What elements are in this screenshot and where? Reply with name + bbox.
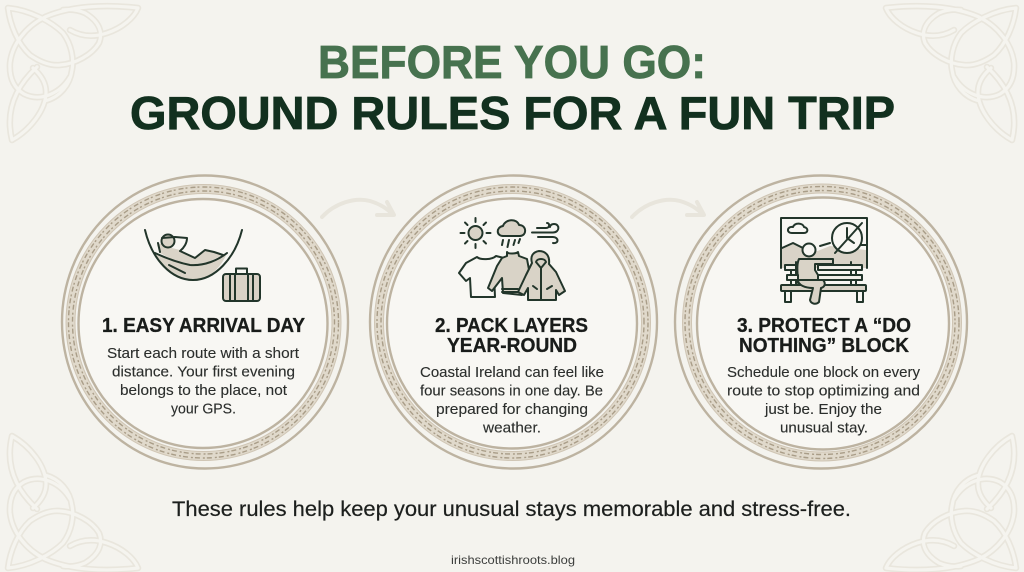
body text: Start each route with a short	[107, 346, 299, 362]
arrow: step 1 to step 2	[322, 200, 394, 217]
body text	[107, 346, 299, 418]
body text: belongs to the place, not	[120, 383, 287, 399]
heading: 1. EASY ARRIVAL DAY	[102, 315, 306, 337]
panel: step 2 pack layers year-round	[370, 176, 657, 468]
body text	[727, 365, 921, 436]
heading	[435, 315, 588, 357]
title: GROUND RULES FOR A FUN TRIP	[130, 87, 895, 139]
heading: NOTHING” BLOCK	[739, 335, 910, 357]
heading	[737, 315, 911, 357]
body text: route to stop optimizing and	[727, 384, 920, 400]
body text: weather.	[482, 420, 541, 436]
heading: YEAR-ROUND	[447, 335, 577, 357]
source credit: irishscottishroots.blog	[451, 553, 575, 567]
icon: person on bench with crossed-out clock	[781, 218, 867, 304]
icon: weather and clothing layers	[459, 218, 565, 300]
body text: four seasons in one day. Be	[420, 384, 603, 400]
body text: prepared for changing	[436, 402, 588, 418]
closing message: These rules help keep your unusual stays memorable and stress-free.	[172, 498, 851, 521]
body text	[420, 365, 604, 436]
heading: 2. PACK LAYERS	[435, 315, 588, 337]
body text: unusual stay.	[780, 420, 868, 436]
corner knot: top right	[886, 6, 1016, 140]
title: BEFORE YOU GO:	[318, 36, 706, 88]
icon: person in hammock with suitcase	[145, 230, 260, 301]
body text: your GPS.	[171, 402, 236, 418]
heading: 3. PROTECT A “DO	[737, 315, 911, 337]
panel: step 1 easy arrival day	[62, 176, 348, 468]
body text: just be. Enjoy the	[764, 402, 882, 418]
corner knot: top left	[8, 6, 138, 140]
title	[130, 36, 895, 139]
corner knot: bottom right	[886, 436, 1016, 570]
panel: step 3 protect a do nothing block	[675, 176, 967, 468]
body text: Coastal Ireland can feel like	[420, 365, 604, 381]
body text: distance. Your first evening	[112, 364, 295, 380]
corner knot: bottom left	[8, 436, 138, 570]
body text: Schedule one block on every	[727, 365, 921, 381]
arrow: step 2 to step 3	[632, 200, 704, 217]
